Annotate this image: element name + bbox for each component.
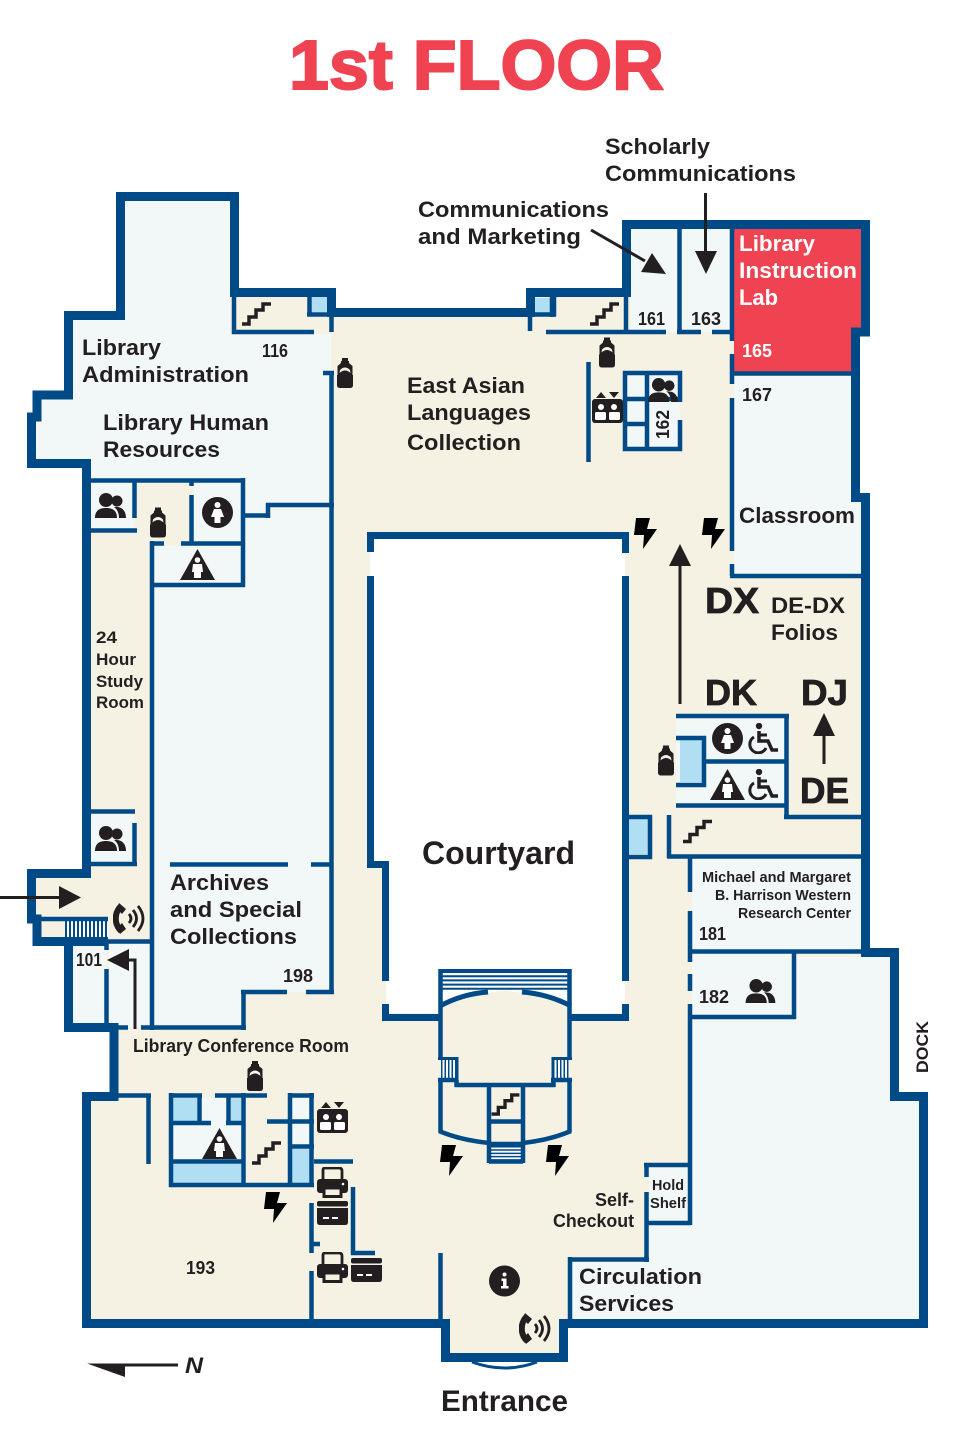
icons: stairs (242, 304, 712, 1163)
arrow: to room 101 (107, 949, 135, 1029)
label: archives and special collections: Collections (170, 924, 297, 949)
label: harrison western research center: Michael and Margaret (702, 869, 851, 886)
label: circulation services: Circulation (579, 1264, 702, 1289)
label: scholarly communications: Scholarly (605, 134, 711, 159)
room number 101: 101 (76, 950, 102, 970)
courtyard (370, 539, 625, 1013)
outer walls (32, 196, 924, 1358)
call number DK: DK (705, 672, 757, 713)
label: communications and marketing (418, 197, 609, 249)
stair hatching (65, 921, 570, 1160)
panel: south core rooms (173, 1098, 310, 1159)
label: library instruction lab: Lab (739, 285, 778, 310)
label: library administration (82, 335, 249, 387)
room number 181: 181 (699, 924, 726, 944)
call number DX: DX (705, 580, 759, 621)
icons: printers (317, 1168, 348, 1282)
room number 162: 162 (653, 410, 673, 439)
label: entrance: Entrance (441, 1385, 568, 1418)
label: harrison western research center (702, 869, 851, 922)
north arrow (87, 1353, 204, 1378)
panel: circulation services (572, 957, 919, 1319)
label: archives and special collections: Archives (170, 870, 269, 895)
arrow: to room 163 (695, 193, 717, 274)
label: circulation services: Services (579, 1291, 674, 1316)
room number 167: 167 (742, 385, 772, 405)
label: archives and special collections (170, 870, 302, 949)
panel: restrooms east (676, 718, 784, 805)
panel: classroom (734, 376, 861, 574)
title: 1st FLOOR (289, 26, 664, 104)
arrow: DE to DJ (813, 713, 835, 764)
icons: water fountains (150, 338, 674, 1091)
label: library human resources: Library Human (103, 410, 269, 435)
north arrow: N (185, 1353, 204, 1378)
panel: library instruction lab (734, 229, 861, 372)
panel: archives and special collections area (154, 505, 331, 1027)
label: self-checkout: Checkout (553, 1211, 634, 1231)
label: library human resources: Resources (103, 437, 220, 462)
label: DE-DX folios: DE-DX (771, 593, 845, 618)
building floor (32, 196, 924, 1358)
icon: information (489, 1266, 520, 1296)
label: library administration: Administration (82, 362, 249, 387)
label: scholarly communications (605, 134, 796, 186)
label: harrison western research center: B. Harrison Western (715, 887, 851, 904)
panel: western research center and room 182 (692, 859, 861, 1017)
label: east asian languages collection: Languages (407, 400, 531, 425)
label: 24 hour study room (96, 628, 144, 712)
label: self-checkout: Self- (595, 1190, 634, 1210)
room number 165: 165 (742, 341, 772, 361)
panel: water and elevator shafts (173, 297, 702, 1183)
panel: small rooms west side (73, 483, 241, 1027)
room number 161: 161 (638, 309, 665, 329)
icons: phones (116, 903, 549, 1344)
label: hold shelf (650, 1177, 687, 1212)
call number DJ: DJ (801, 672, 848, 713)
label: dock: DOCK (913, 1020, 932, 1073)
label: library administration: Library (82, 335, 162, 360)
room number 163: 163 (691, 309, 721, 329)
icons: power outlets (264, 518, 725, 1223)
icons: card stations (317, 1201, 382, 1282)
label: classroom: Classroom (739, 503, 855, 528)
label: self-checkout (553, 1190, 634, 1231)
label: library instruction lab: Library (739, 231, 816, 256)
icons: elevators (317, 392, 623, 1133)
label: circulation services (579, 1264, 702, 1316)
panel: hold shelf (649, 1167, 688, 1222)
label: library instruction lab (739, 231, 857, 310)
icons: men's restrooms (180, 549, 745, 1159)
icons: women's restrooms (202, 497, 743, 754)
label: courtyard: Courtyard (422, 835, 575, 871)
label: east asian languages collection (407, 373, 531, 455)
rotunda floor (441, 991, 569, 1060)
interior walls (36, 229, 863, 1368)
label: east asian languages collection: East Asian (407, 373, 525, 398)
label: communications and marketing: Communications (418, 197, 609, 222)
label: 24 hour study room: Study (96, 672, 144, 691)
arrow: west entrance (0, 886, 81, 909)
arrow: north along stacks (669, 544, 691, 704)
room number 193: 193 (186, 1258, 215, 1278)
call number DE: DE (800, 770, 849, 811)
label: library instruction lab: Instruction (739, 258, 857, 283)
icons: accessible (750, 723, 778, 799)
label: hold shelf: Shelf (650, 1195, 687, 1212)
room number 198: 198 (283, 966, 313, 986)
label: harrison western research center: Research Center (738, 905, 851, 922)
label: DE-DX folios (771, 593, 845, 645)
room number 116: 116 (262, 341, 288, 361)
panel: room 162 (625, 373, 680, 449)
label: 24 hour study room: Hour (96, 650, 136, 669)
label: library human resources (103, 410, 269, 462)
label: hold shelf: Hold (652, 1177, 684, 1194)
label: DE-DX folios: Folios (771, 620, 838, 645)
label: communications and marketing: and Marketing (418, 224, 581, 249)
label: east asian languages collection: Collection (407, 430, 521, 455)
label: library conference room: Library Conference Room (133, 1036, 349, 1056)
label: 24 hour study room: 24 (96, 628, 118, 647)
icons: study rooms (95, 378, 775, 1003)
label: scholarly communications: Communications (605, 161, 796, 186)
arrow: to room 161 (591, 230, 666, 274)
label: archives and special collections: and Special (170, 897, 302, 922)
panel: library administration and human resources area (31, 201, 331, 515)
panel: rooms 161 and 163 (631, 229, 732, 332)
room number 182: 182 (699, 987, 729, 1007)
label: 24 hour study room: Room (96, 693, 144, 712)
